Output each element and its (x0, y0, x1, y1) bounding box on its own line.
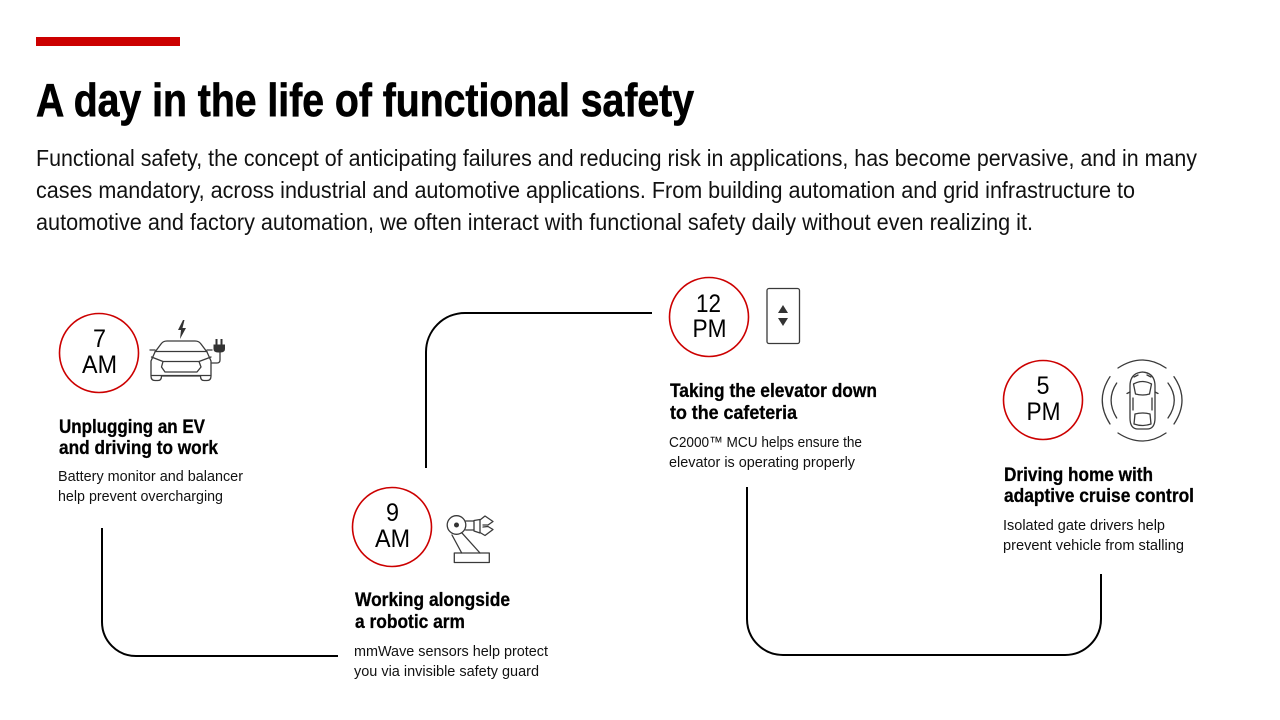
description: battery monitor (58, 468, 243, 505)
time badge: 7 AM: 7 (93, 325, 106, 353)
description: isolated gate drivers (1003, 517, 1184, 554)
time badge: 7 AM (60, 314, 138, 392)
icon: robotic arm (447, 516, 493, 562)
accent bar (36, 37, 180, 46)
heading: Unplugging an EV: Unplugging an EV (59, 417, 205, 438)
time badge: 12 PM: PM (692, 315, 726, 343)
intro paragraph: cases mandatory, across industrial and automotive applications. From building automation and grid infrastructure to (36, 177, 1135, 203)
heading: Taking the elevator: Taking the elevator down (670, 381, 877, 402)
heading: Taking the elevator (670, 381, 877, 424)
step: 12 PM (669, 278, 877, 471)
heading: Unplugging an EV (59, 417, 218, 459)
time badge: 7 AM: AM (82, 351, 117, 379)
description: mmWave sensors: mmWave sensors help protect (354, 643, 549, 660)
intro paragraph (36, 145, 1197, 235)
description: mmWave sensors: you via invisible safety guard (354, 663, 539, 680)
title: A day in the life of functional safety (36, 74, 694, 126)
description: C2000 MCU: elevator is operating properly (669, 454, 855, 471)
time badge: 12 PM: 12 (696, 290, 721, 318)
intro paragraph: automotive and factory automation, we often interact with functional safety daily without even realizing it. (36, 209, 1033, 235)
description: C2000 MCU: C2000™ MCU helps ensure the (669, 434, 862, 451)
connector: 7 AM to 9 AM (102, 528, 338, 656)
connector: 9 AM to 12 PM (426, 313, 652, 468)
heading: Working alongside: Working alongside (355, 590, 510, 611)
time badge: 5 PM: 5 (1036, 372, 1050, 400)
icon: electric car with plug (150, 320, 225, 380)
description: C2000 MCU (669, 434, 862, 471)
icon: car with surrounding sensor waves (1102, 360, 1182, 441)
heading: Driving home: adaptive cruise control (1004, 486, 1194, 507)
time badge: 9 AM (352, 488, 432, 566)
description: mmWave sensors (354, 643, 549, 680)
heading: Unplugging an EV: and driving to work (59, 438, 218, 459)
time badge: 12 PM (670, 278, 748, 356)
connector: 12 PM to 5 PM (747, 487, 1101, 655)
heading: Taking the elevator: to the cafeteria (670, 403, 797, 424)
description: isolated gate drivers: Isolated gate drivers help (1003, 517, 1165, 534)
time badge: 9 AM: 9 (386, 499, 399, 527)
heading: Driving home (1004, 465, 1194, 507)
time badge: 9 AM: AM (375, 525, 410, 553)
step: 5 PM (1003, 360, 1194, 554)
time badge: 5 PM (1004, 360, 1082, 440)
heading: Driving home: Driving home with (1004, 465, 1153, 486)
step: 7 AM (58, 314, 243, 505)
intro paragraph: Functional safety, the concept of anticipating failures and reducing risk in applications, has become pervasive, and in many (36, 145, 1197, 171)
heading: Working alongside: a robotic arm (355, 612, 465, 633)
description: battery monitor: help prevent overcharging (58, 488, 223, 505)
step: 9 AM (352, 488, 549, 680)
heading: Working alongside (355, 590, 510, 633)
description: battery monitor: Battery monitor and balancer (58, 468, 243, 485)
description: isolated gate drivers: prevent vehicle from stalling (1003, 537, 1184, 554)
time badge: 5 PM: PM (1026, 398, 1060, 426)
icon: elevator buttons (767, 288, 800, 344)
